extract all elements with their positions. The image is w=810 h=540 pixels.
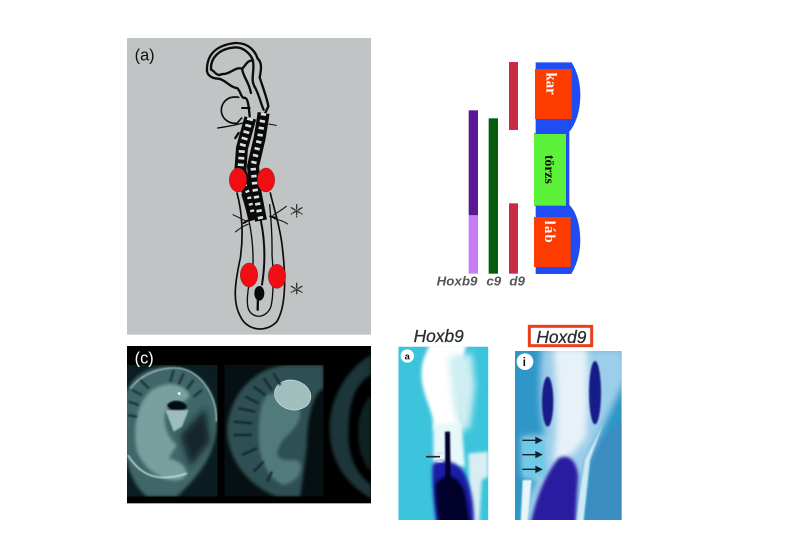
- marker: lower asterisk: [291, 283, 302, 295]
- region: törzs: törzs: [542, 155, 557, 184]
- label: d9: d9: [509, 273, 525, 288]
- bar: c9: [489, 118, 498, 274]
- bar: d9 upper: [509, 62, 518, 130]
- bar: d9 lower: [509, 203, 518, 274]
- heading: Hoxd9 in red box: Hoxd9: [536, 327, 587, 347]
- badge: i: [517, 353, 533, 370]
- label: (a): (a): [135, 46, 155, 64]
- panel: (a) embryo line drawing: [127, 38, 371, 335]
- region: kar: [535, 69, 572, 119]
- heading: Hoxb9: Hoxb9: [414, 326, 464, 346]
- marker: upper asterisk: [291, 205, 302, 217]
- label: c9: c9: [486, 273, 502, 288]
- region: törzs: [534, 134, 566, 206]
- micrograph: third embryo: [330, 355, 371, 498]
- region: kar: kar: [543, 72, 559, 95]
- marker: red limb buds: [229, 168, 286, 288]
- shape: blue body outline: [534, 62, 580, 274]
- panel: Hox expression bars and body regions: [437, 62, 580, 288]
- image: Hoxd9 embryo: [515, 348, 627, 527]
- badge: a: [401, 349, 414, 363]
- bar: Hoxb9: [469, 110, 478, 274]
- lower body walls: [235, 193, 285, 329]
- image: Hoxb9 embryo: [398, 343, 488, 527]
- arrows: three marks: [522, 438, 541, 472]
- panel: in situ images: [398, 326, 627, 527]
- micrograph: second embryo: [224, 365, 324, 497]
- panel: (c) electron micrographs: [123, 346, 371, 503]
- label: (c): (c): [135, 349, 154, 367]
- drawing: somite columns: [240, 113, 264, 301]
- micrograph: first embryo: [123, 365, 218, 497]
- label: Hoxb9: Hoxb9: [437, 273, 478, 288]
- drawing: embryo outline: [207, 43, 288, 329]
- region: láb: [534, 217, 571, 267]
- badge: i: i: [523, 355, 526, 369]
- badge: a: a: [405, 351, 411, 361]
- region: láb: láb: [541, 221, 557, 244]
